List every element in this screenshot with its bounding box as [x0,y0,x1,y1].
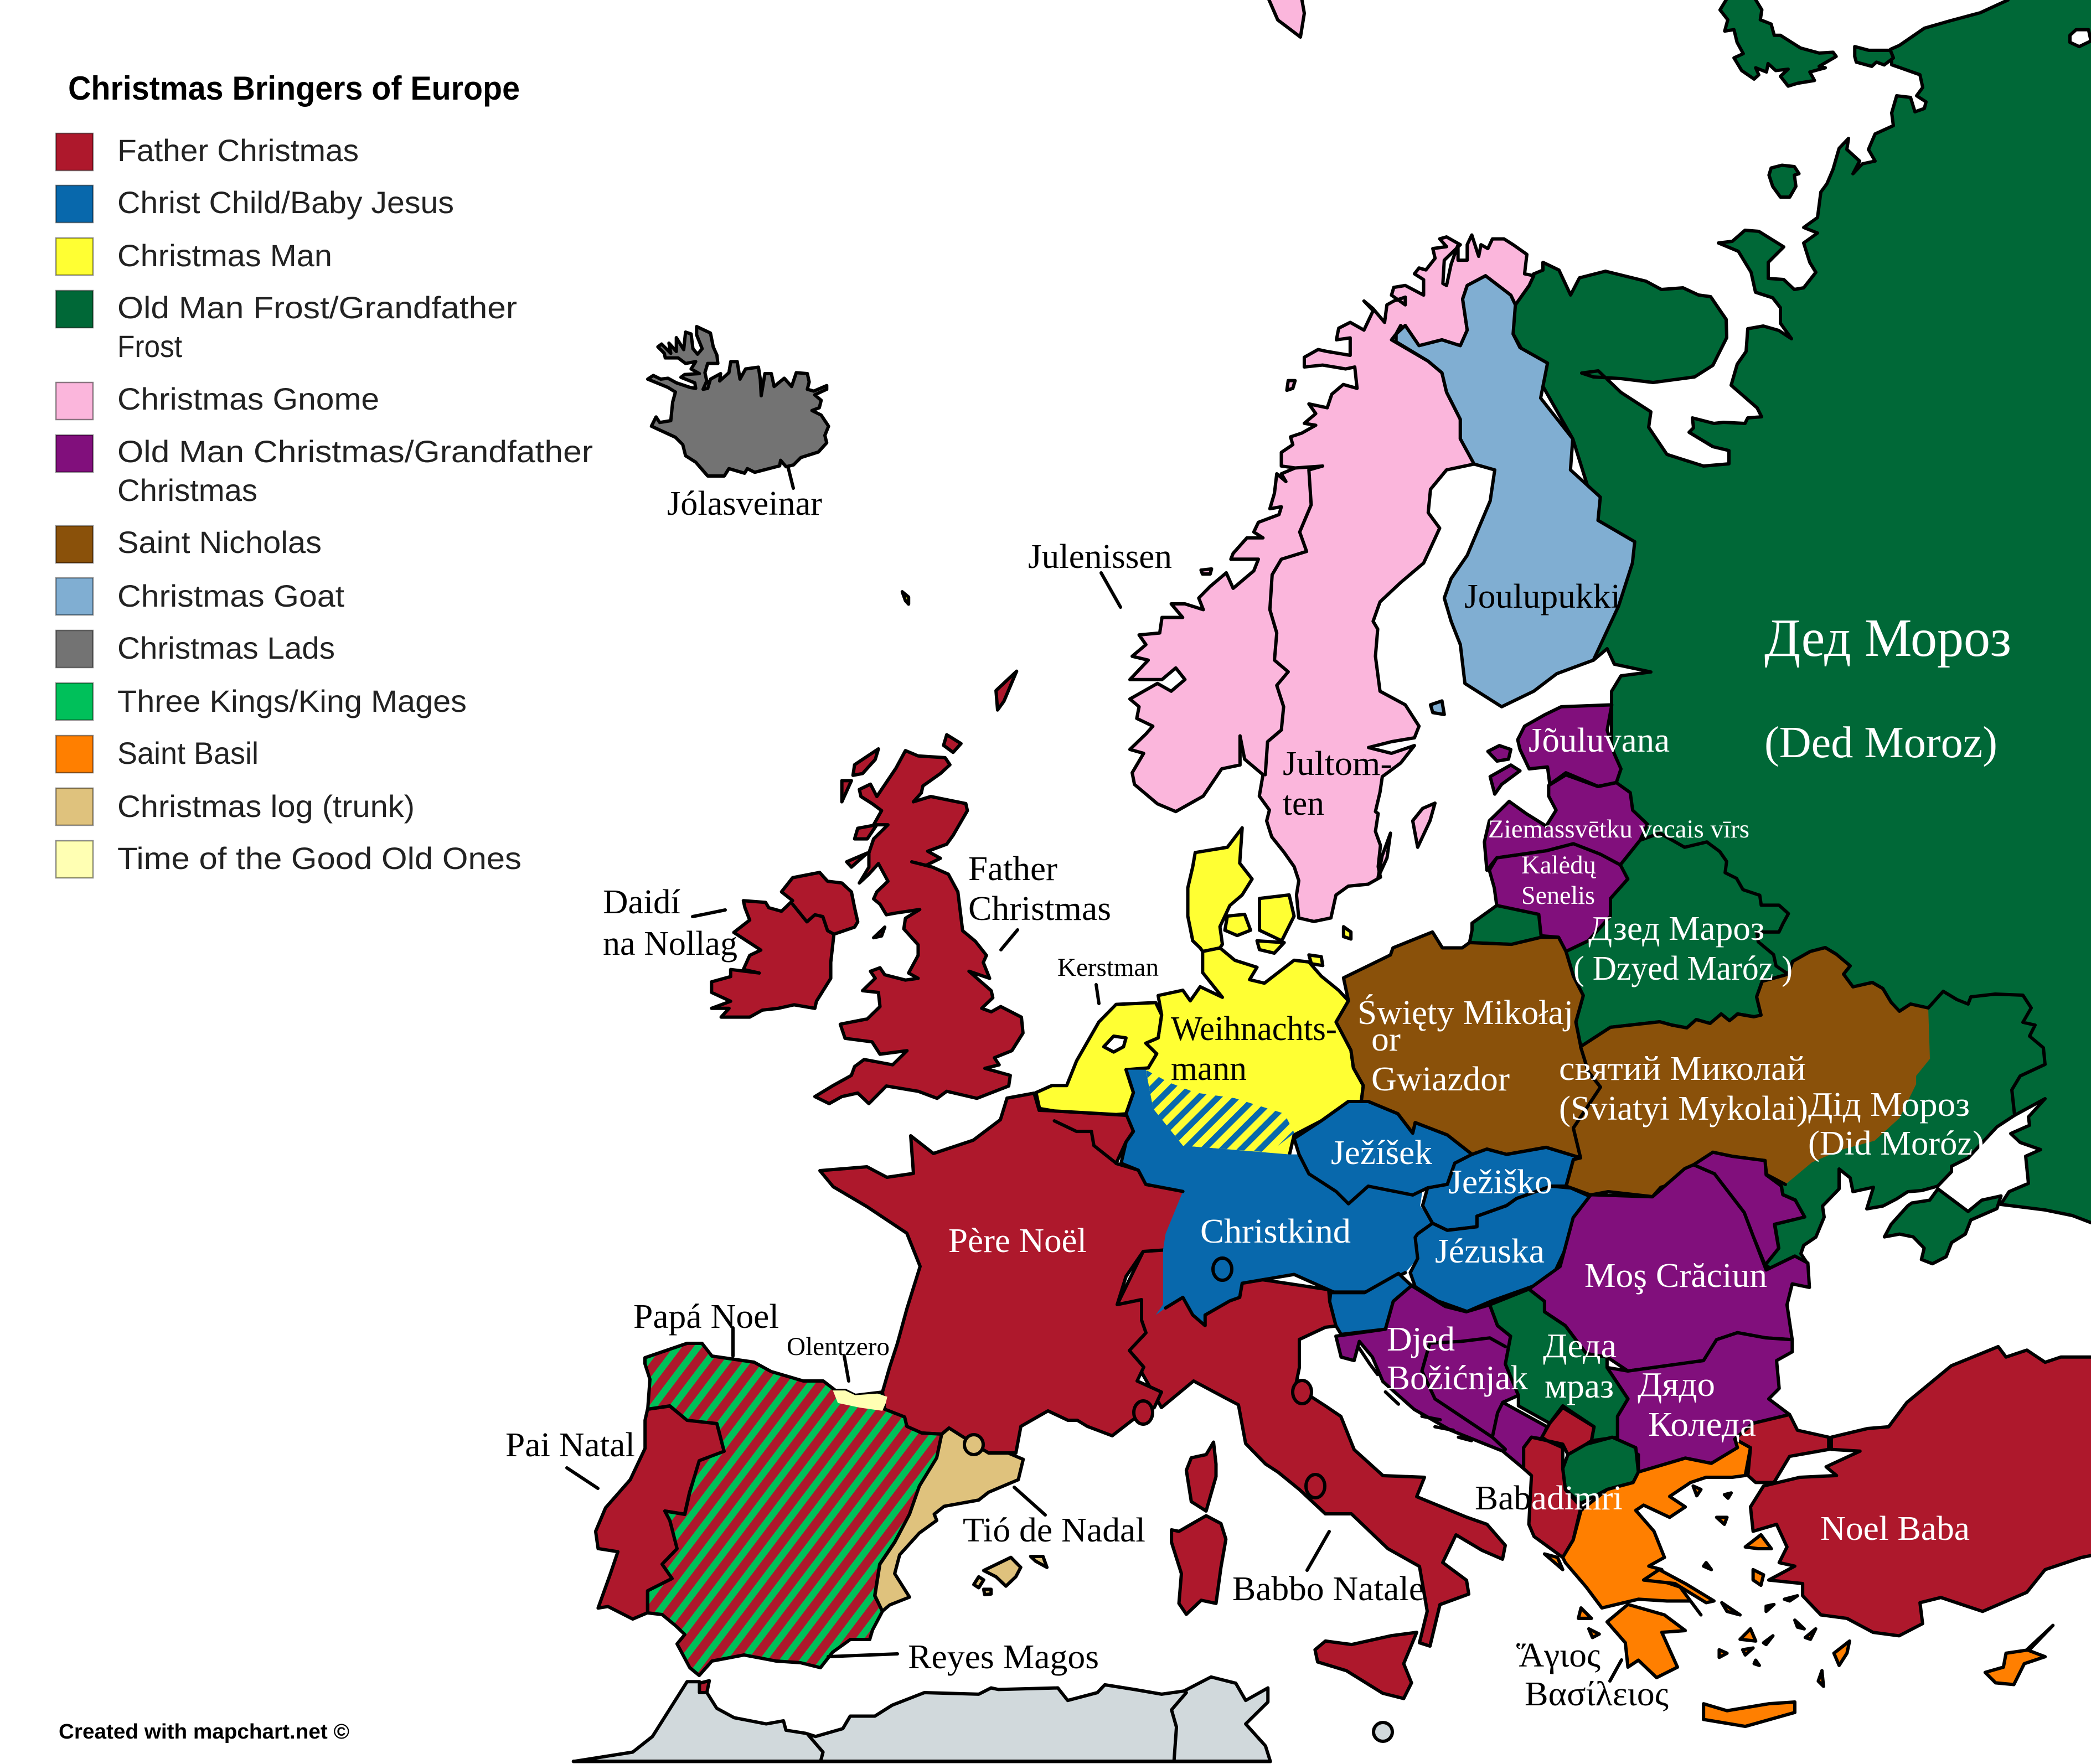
legend swatch: Saint Nicholas [56,526,93,563]
legend text: Saint Nicholas: Saint Nicholas [117,525,322,560]
map: Chios [1753,1570,1763,1585]
map: Greece mainland [1563,1439,1751,1615]
map: Turkey in Europe [1735,1415,1829,1482]
label: Dzyed Maroz latin: ( Dzyed Maróz ) [1573,950,1793,987]
label: na Nollag: na Nollag [603,925,737,963]
map: Basque Olentzero region [833,1390,887,1411]
map: Orkney [943,734,961,752]
map: Kanin peninsula [1720,0,1836,86]
map: Corfu [1545,1554,1563,1570]
map: Vatican [1306,1475,1325,1498]
label: Bozicnjak: Božićnjak [1387,1359,1528,1397]
legend text: Christmas Man: Christmas Man [117,238,332,273]
map: Evia [1644,1570,1714,1603]
legend text: Christ Child: Christ Child/Baby Jesus [117,185,454,220]
map: Zakynthos [1589,1629,1599,1638]
map: Sicily [1315,1632,1417,1699]
map: France and Belgium [820,1093,1188,1453]
map: Italy [1117,1250,1505,1646]
map: Hiiumaa [1488,746,1511,761]
label: mann: mann [1171,1050,1247,1088]
title: Christmas Bringers of Europe [68,70,520,107]
legend swatch: Good Old Ones [56,841,93,878]
map: Funen [1225,914,1251,935]
map: Moldova [1694,1152,1805,1265]
map: Slovakia [1423,1147,1581,1230]
label: Gwiazdor: Gwiazdor [1371,1061,1510,1098]
map: Christkind blue region [1121,1070,1433,1326]
map: Crimea [1885,1189,2001,1264]
map: Isle of Man [874,927,885,938]
legend text: Christmas Goat: Christmas Goat [117,578,344,613]
map: Lolland [1257,941,1284,953]
map: Zealand [1259,895,1294,941]
map: Cyprus [1985,1626,2053,1685]
map: Christkind south border [1165,1272,1405,1326]
map: IJsselmeer [1104,1036,1126,1052]
label: Reyes Magos: Reyes Magos [908,1638,1099,1676]
map: Ukraine south-west border [1566,1047,1785,1197]
map: Serbia [1490,1289,1628,1441]
label: Pai Natal: Pai Natal [505,1426,635,1464]
map: Menorca [1031,1556,1047,1568]
label: Ziemassvetku vecais virs: Ziemassvētku vecais vīrs [1488,815,1749,844]
label: Babbo Natale: Babbo Natale [1232,1570,1424,1608]
map: Formentera [984,1589,991,1595]
legend swatch: Old Man Christmas [56,435,93,472]
legend text: Good Old Ones: Time of the Good Old Ones [117,841,522,876]
legend swatch: Christ Child [56,185,93,223]
legend swatch: Christmas Goat [56,578,93,615]
map: Portugal [596,1406,724,1619]
label: Sviatyi Mykolai latin: (Sviatyi Mykolai) [1559,1090,1808,1127]
map: Algeria-Tunisia border [1171,1693,1186,1761]
label: Vasileios: Βασίλειος [1525,1675,1669,1713]
map: Slovenia [1330,1274,1412,1334]
map: Morocco-Algeria border [808,1735,823,1761]
map: Lesbos [1746,1535,1772,1549]
label: Mos Craciun: Moş Crăciun [1584,1257,1767,1295]
map: North Africa [574,1677,1271,1761]
map: Norway and Sweden [1130,235,1534,922]
map: Lithuania [1489,844,1628,951]
map: Montenegro border [1493,1403,1505,1450]
map: San Marino [1293,1380,1312,1404]
label: Christmas: Christmas [968,890,1111,928]
legend swatch: Christmas Man [56,238,93,275]
map: Iceland [648,327,829,476]
map: Croatia, Bosnia and Montenegro [1336,1286,1547,1468]
map: Hungary [1410,1186,1591,1311]
map: Crete [1703,1702,1795,1726]
map: Kefalonia [1578,1608,1592,1618]
label: Jultomten line 1: Jultom- [1283,745,1392,783]
map: Czechia [1294,1101,1472,1204]
label: Jezuska: Jézuska [1435,1233,1545,1270]
label: Jouluvana: Jõuluvana [1529,722,1670,759]
label: Djed: Djed [1387,1321,1455,1358]
label: Jultomten line 2: ten [1283,785,1324,822]
label: or: or [1371,1021,1401,1058]
label: Senelis: Senelis [1521,881,1595,910]
map: Bulgaria [1607,1333,1792,1472]
map: Great Britain [815,751,1023,1104]
legend [56,133,593,878]
map: Spain hatch (Reyes Magos) [645,1343,942,1675]
map: Monaco [1134,1401,1153,1424]
label: Ded Moroz latin: (Ded Moroz) [1764,718,1997,767]
map: Russia [1513,0,2091,1226]
map: Ceuta [699,1681,709,1693]
map: Limnos [1717,1517,1727,1524]
credit: Created with mapchart.net © [59,1720,349,1744]
map: Shetland [996,671,1016,710]
baseline of map [574,1760,1270,1763]
label: mraz: мраз [1545,1368,1614,1405]
label: Olentzero: Olentzero [787,1332,890,1361]
map: Saaremaa [1490,765,1520,794]
legend text: Saint Basil: Saint Basil [117,736,259,770]
map: Belarus [1566,833,1788,1047]
map: Albania [1524,1437,1581,1558]
label: Father: Father [968,850,1057,888]
map: Norway-Sweden border [1265,466,1323,775]
label: Jezisek: Ježíšek [1331,1134,1432,1172]
map: Thasos [1693,1486,1701,1496]
map: Sardinia [1171,1515,1226,1615]
map: Skye [855,825,877,839]
map: Ukraine northern border [1581,948,1928,1047]
map: Mallorca [984,1558,1021,1586]
legend text: Frost: Frost [117,329,182,364]
map: Jutland [1188,828,1252,951]
map: Gotland [1413,803,1435,847]
legend text: Christmas Gnome: Christmas Gnome [117,381,379,416]
map: Kaliningrad [1470,906,1541,944]
map: Arctic inlet [2070,30,2091,46]
label: Did Moroz latin: (Did Moróz) [1808,1125,1984,1162]
map: Belgium-France border [1054,1121,1116,1163]
label: Tio de Nadal: Tió de Nadal [963,1512,1145,1549]
map: Uist [842,780,851,802]
legend text: Christmas: Christmas [117,473,257,508]
map: Aegean islets [1703,1493,1824,1687]
label: Babadimri: Babadimri [1475,1480,1623,1517]
map: Croatia-Bosnia border [1422,1338,1505,1437]
map: hatched Germany region [1146,1070,1294,1152]
map: Romania [1529,1165,1809,1371]
map: Dalmatian islands [1359,1348,1472,1441]
map: Lofoten islands [1287,381,1295,390]
map: North Macedonia [1563,1437,1638,1503]
label: Weihnachts-: Weihnachts- [1171,1010,1337,1048]
legend swatch: Saint Basil [56,736,93,773]
label: Daidi: Daidí [603,883,680,921]
map: Peloponnese [1607,1605,1685,1678]
label: Deda: Деда [1543,1327,1617,1365]
map: Ukraine east (green base) [1566,948,2045,1272]
label: Jezisko: Ježiško [1448,1163,1552,1201]
label: Koleda: Коледа [1648,1406,1756,1444]
label: Dzed Maroz Cyrillic: Дзед Мароз [1588,910,1764,948]
legend text: Old Man Frost: Old Man Frost/Grandfather [117,290,517,325]
label: Papa Noel: Papá Noel [633,1298,779,1336]
map: Kolguev island [1769,165,1799,197]
map: Rugen [1309,955,1323,965]
label: Agios: Ἅγιος [1516,1637,1600,1674]
label: Julenissen: Julenissen [1028,538,1172,576]
label: Kerstman: Kerstman [1057,953,1159,982]
map: Lake Geneva circle Liechtenstein marker [1213,1258,1232,1280]
label: Did Moroz Cyrillic: Дід Мороз [1808,1086,1970,1124]
map: Germany [1126,948,1364,1156]
map: Svalbard fragment [1267,0,1304,37]
map: Oland [1378,833,1391,877]
map: Ibiza [974,1577,984,1588]
map: Islay [846,853,868,867]
map: Andorra [964,1435,983,1455]
map: Rhodes [1834,1641,1850,1665]
legend text: Three Kings: Three Kings/King Mages [117,684,467,718]
map: Ukraine west (Saint Nicholas brown) [1566,948,1930,1197]
label: Jolasveinar: Jólasveinar [667,485,822,523]
legend swatch: Christmas Lads [56,630,93,668]
map: Malta [1374,1722,1392,1741]
map: Poland [1336,932,1600,1158]
label: Sviatyi Mykolai Cyrillic: святий Миколай [1559,1050,1806,1088]
leader lines [567,468,1622,1681]
legend text: Christmas Lads: Christmas Lads [117,630,335,665]
legend text: Father Christmas: Father Christmas [117,133,359,168]
map: Faroe Islands [902,592,908,604]
map: Lewis [853,749,879,775]
map: Catalonia and Valencia log region [875,1428,1023,1611]
map: Anatolia [1751,1347,2091,1636]
label: Kaledu: Kalėdų [1521,851,1596,880]
map: Corsica [1186,1442,1216,1511]
legend text: Christmas log: Christmas log (trunk) [117,789,415,824]
legend swatch: Christmas log [56,788,93,825]
label: Joulupukki: Joulupukki [1464,578,1620,615]
map: Ireland [711,872,858,1017]
label: Noel Baba: Noel Baba [1820,1510,1970,1548]
label: Dyado: Дядо [1638,1366,1715,1404]
map: Christkind west border [1121,1070,1183,1192]
map: Bornholm [1344,927,1351,939]
map: Finland [1396,276,1635,707]
map: Norwegian island [1201,569,1211,574]
legend swatch: Old Man Frost [56,291,93,328]
legend swatch: Three Kings [56,683,93,720]
map: Aland [1431,701,1444,715]
label: Pere Noel: Père Noël [948,1222,1087,1260]
legend swatch: Christmas Gnome [56,382,93,420]
label: Swiety Mikolaj: Święty Mikołaj [1357,994,1573,1032]
map: Netherlands and Flanders [1036,1002,1161,1115]
map: northern Russia headland [1855,46,1893,66]
legend text: Old Man Christmas: Old Man Christmas/Grandfather [117,434,593,469]
map: Kosovo [1542,1408,1594,1455]
map: Latvia [1484,775,1648,870]
label: Ded Moroz Cyrillic: Дед Мороз [1764,608,2011,668]
map: Estonia [1517,705,1621,787]
label: Christkind: Christkind [1200,1213,1351,1250]
map: Northern Ireland border [793,904,834,934]
legend swatch: Father Christmas [56,133,93,170]
